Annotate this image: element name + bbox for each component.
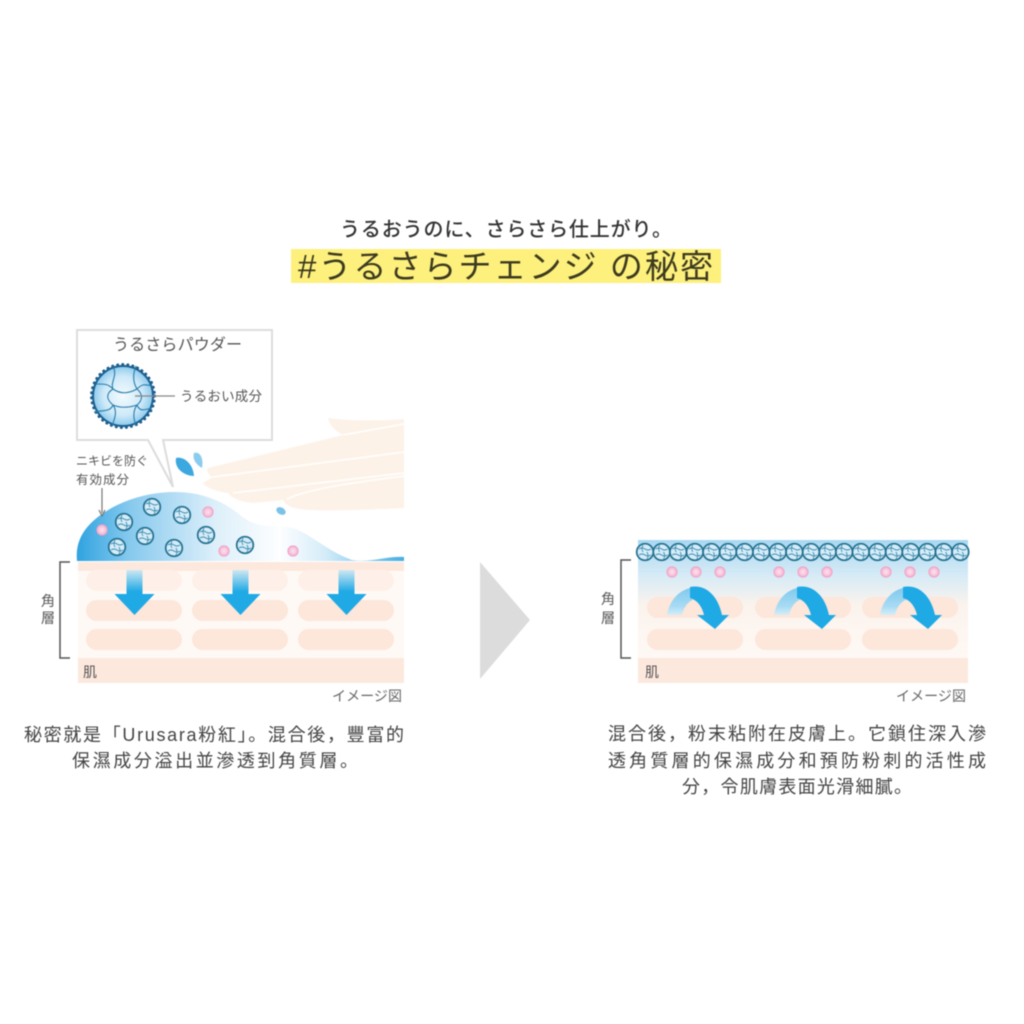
heading: subtitle: うるおうのに、さらさら仕上がり。 xyxy=(340,218,672,241)
text block: right caption: 分，令肌膚表面光滑細膩。 xyxy=(682,777,912,797)
text block: right caption: 混合後，粉末粘附在皮膚上。它鎖住深入滲 xyxy=(608,724,986,744)
bracket: stratum corneum xyxy=(41,562,70,658)
active ingredient particles xyxy=(96,506,299,557)
label: image note: イメージ図 xyxy=(332,688,402,704)
label: skin: 肌 xyxy=(645,664,659,680)
callout: powder xyxy=(77,330,272,487)
label: skin: 肌 xyxy=(83,664,97,680)
moisture powder particles xyxy=(109,499,253,556)
panel: before diagram xyxy=(41,330,404,704)
text block: left caption: 秘密就是「Urusara粉紅」。混合後，豐富的 xyxy=(24,725,404,745)
icon: hand xyxy=(203,418,404,510)
skin layers xyxy=(78,562,404,683)
panel: after diagram xyxy=(601,540,969,704)
label: image note: イメージ図 xyxy=(896,688,966,704)
arrow: large chevron xyxy=(480,562,530,679)
icon: liquid blob xyxy=(77,492,404,561)
text block: left caption: 保濕成分溢出並滲透到角質層。 xyxy=(72,751,358,771)
heading: highlighted title: #うるさらチェンジ の秘密 xyxy=(298,248,713,285)
text block: right caption: 透角質層的保濕成分和預防粉刺的活性成 xyxy=(608,751,986,771)
arrows down xyxy=(114,570,366,615)
text block: left caption xyxy=(24,725,404,771)
callout: powder: うるさらパウダー xyxy=(113,336,242,354)
callout: powder: うるおい成分 xyxy=(180,389,262,404)
label: acne active ingredient: 有効成分 xyxy=(76,473,129,487)
text block: right caption xyxy=(608,724,986,797)
curved arrows xyxy=(667,587,942,629)
label: acne active ingredient: ニキビを防ぐ xyxy=(76,453,148,468)
bracket: stratum corneum xyxy=(601,560,631,658)
label: acne active ingredient xyxy=(76,453,148,516)
bracket: stratum corneum: 角 xyxy=(41,593,55,609)
powder particle row xyxy=(637,544,969,560)
bracket: stratum corneum: 層 xyxy=(601,610,615,626)
active ingredient row xyxy=(666,566,940,578)
bracket: stratum corneum: 層 xyxy=(41,610,55,626)
bracket: stratum corneum: 角 xyxy=(601,591,615,607)
skin layers with film xyxy=(638,540,968,683)
icon: droplets xyxy=(176,453,287,517)
